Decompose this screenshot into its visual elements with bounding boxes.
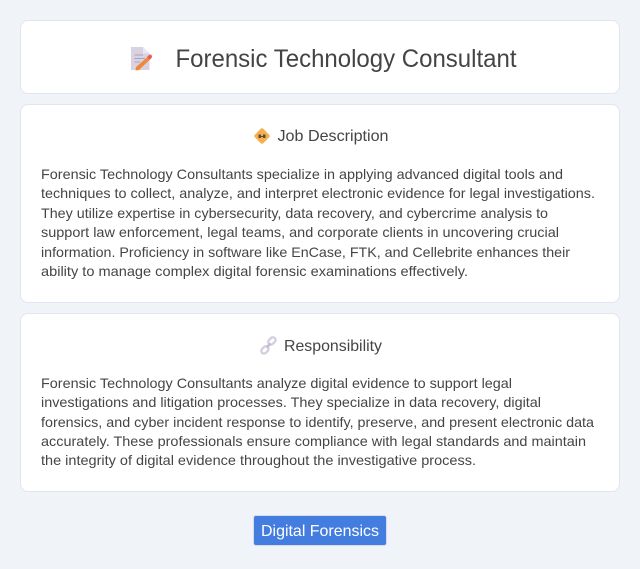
text block: responsibility: investigations and litigation processes. They specialize in data recovery, digital <box>41 394 541 410</box>
heading: responsibility: Responsibility <box>284 338 382 355</box>
text block: job description: techniques to collect, analyze, and interpret electronic evidence for legal investigations. <box>41 185 595 201</box>
text block: responsibility: forensics, and cyber incident response to identify, preserve, and present electronic data <box>41 414 594 430</box>
icon: job description diamond <box>254 128 270 144</box>
icon: chain link <box>260 336 277 355</box>
tag button: digital forensics <box>253 515 387 546</box>
text block: responsibility: Forensic Technology Consultants analyze digital evidence to support legal <box>41 375 512 391</box>
text block: job description <box>41 166 595 279</box>
text block: responsibility: accurately. These professionals ensure compliance with legal standards and maintain <box>41 433 586 449</box>
text block: job description: support law enforcement, legal teams, and corporate clients in uncovering crucial <box>41 224 559 240</box>
text block: responsibility <box>41 375 594 468</box>
text block: job description: information. Proficiency in software like EnCase, FTK, and Cellebrite enhances their <box>41 244 570 260</box>
panel: title card <box>20 20 620 94</box>
panel: job description <box>20 104 620 303</box>
title: Forensic Technology Consultant <box>176 45 517 73</box>
icon: document with pencil <box>131 47 152 70</box>
heading: job description: Job Description <box>278 128 388 145</box>
panel: responsibility <box>20 313 620 492</box>
text block: job description: Forensic Technology Consultants specialize in applying advanced digital tools and <box>41 166 563 182</box>
tag label: Digital Forensics <box>261 523 379 540</box>
text block: job description: They utilize expertise in cybersecurity, data recovery, and cybercrime analysis to <box>41 205 548 221</box>
text block: job description: ability to manage complex digital forensic examinations effectively. <box>41 263 468 279</box>
text block: responsibility: the integrity of digital evidence throughout the investigative process. <box>41 452 476 468</box>
